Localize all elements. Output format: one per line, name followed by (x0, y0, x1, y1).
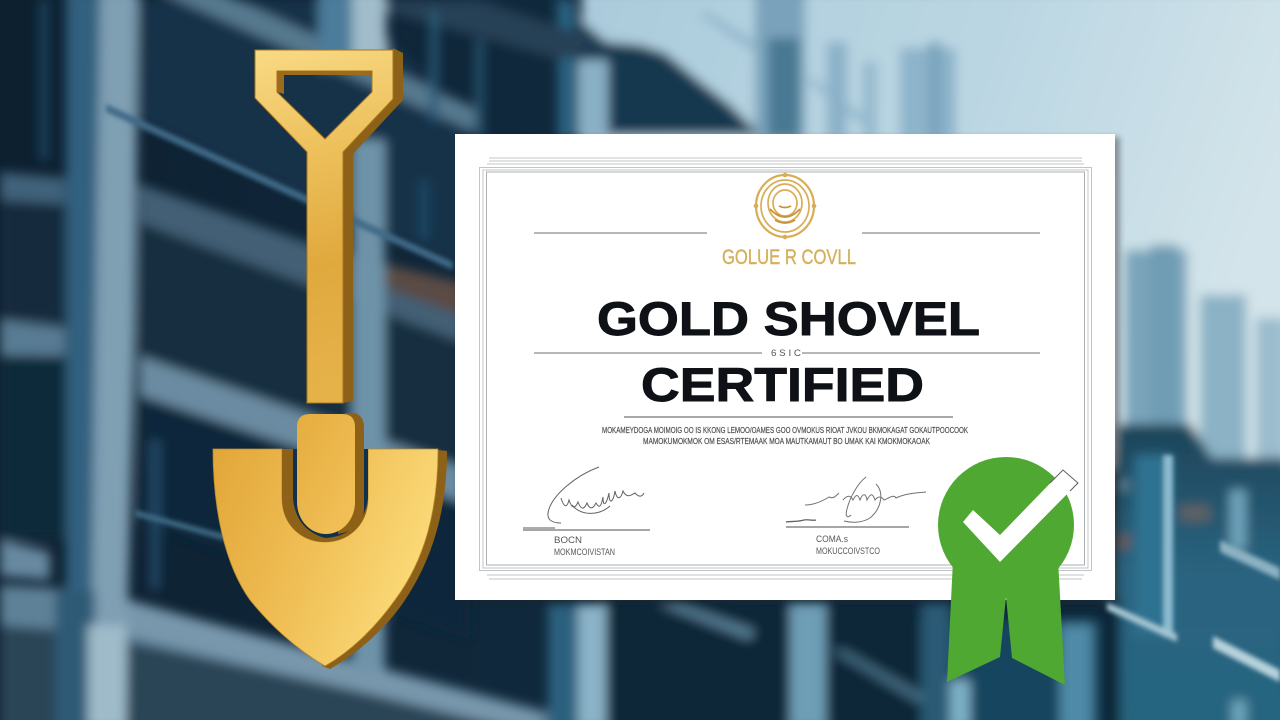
signature left: MOKMCOIVISTAN (554, 547, 615, 557)
certificate body text: MAMOKUMOKMOK OM ESAS/RTEMAAK MOA MAUTKAMAUT BO UMAK KAI KMOKMOKAOAK (643, 437, 931, 446)
icon: gold seal (754, 174, 816, 238)
distant towers top (755, 0, 805, 140)
panel: certificate (455, 134, 1120, 602)
rails and bright details (106, 104, 453, 270)
sky (582, 0, 1280, 470)
shovel neck (297, 413, 364, 534)
icon: check mark (963, 470, 1078, 562)
heading: certified: CERTIFIED (641, 358, 924, 411)
certificate border frames (480, 158, 1092, 579)
signature left: BOCN (554, 535, 582, 545)
near building silhouette top centre (555, 0, 760, 135)
left building slabs (155, 0, 475, 132)
thin verticals in dark frame (40, 0, 48, 160)
signature left (523, 467, 650, 557)
heading: gold shovel: GOLD SHOVEL (597, 292, 980, 345)
shovel blade (213, 449, 447, 669)
certificate body text: MOKAMEYDOGA MOIMOIG OO IS KKONG LEMOO/OAMES GOO OVMOKUS RIOAT JVKOU BKMOKAGAT GOKAUTPOOCOOK (602, 426, 969, 435)
signature right: COMA.s (816, 534, 848, 544)
bottom middle building (600, 600, 1120, 720)
icon: gold shovel (213, 48, 447, 669)
gold organisation name: GOLUE R COVLL (722, 246, 856, 269)
rule lines (534, 233, 1040, 417)
icon: green ribbon badge (938, 457, 1078, 685)
signature right (786, 477, 926, 556)
right towers (1125, 250, 1187, 435)
small divider text: 6 S I C (771, 348, 802, 358)
right lower building (1100, 424, 1280, 720)
left floor shading (139, 222, 470, 470)
signature right: MOKUCCOIVSTCO (816, 546, 880, 556)
columns (66, 0, 102, 600)
shovel handle (255, 48, 403, 403)
certificate body text (602, 426, 969, 446)
crane diagonals (700, 12, 756, 50)
